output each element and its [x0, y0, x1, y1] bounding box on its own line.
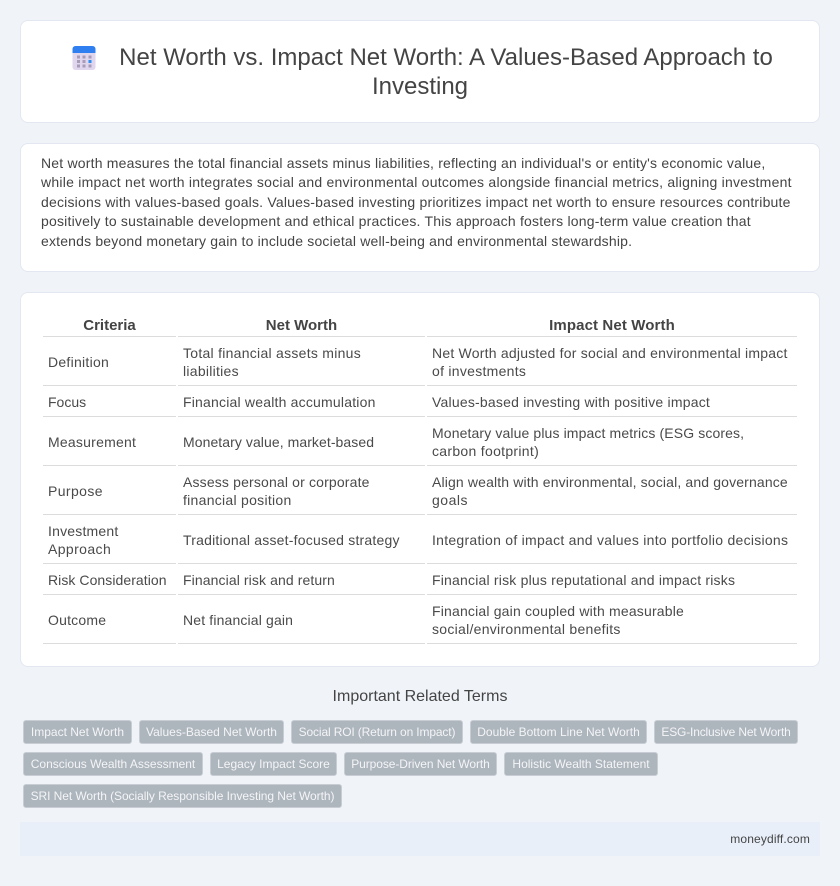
tag: Legacy Impact Score — [217, 757, 330, 771]
title: Net Worth vs. Impact Net Worth: A Values-Based Approach to — [119, 44, 773, 71]
header panel — [20, 20, 820, 123]
tag — [291, 720, 463, 744]
row: risk consideration: Financial risk and return — [183, 572, 335, 588]
row: definition: Net Worth adjusted for social and environmental impact — [432, 345, 788, 361]
row: investment approach — [48, 523, 788, 557]
panel: comparison table — [20, 292, 820, 667]
row: risk consideration: Risk Consideration — [48, 572, 167, 588]
row: risk consideration — [48, 572, 735, 588]
tag — [23, 720, 132, 744]
row: focus — [48, 394, 710, 410]
title: Investing — [372, 73, 468, 100]
tag — [344, 752, 497, 776]
row: measurement: Measurement — [48, 434, 136, 450]
row: outcome: Net financial gain — [183, 612, 293, 628]
icon: calendar — [72, 46, 96, 70]
row: purpose — [48, 474, 788, 508]
row: measurement — [48, 425, 744, 459]
row: purpose: Purpose — [48, 483, 103, 499]
row: investment approach: Traditional asset-focused strategy — [183, 532, 400, 548]
tag: Values-Based Net Worth — [146, 725, 277, 739]
row: purpose: financial position — [183, 492, 292, 508]
tag: SRI Net Worth (Socially Responsible Investing Net Worth) — [31, 789, 334, 803]
comparison table — [43, 316, 797, 644]
row: risk consideration: Financial risk plus reputational and impact risks — [432, 572, 735, 588]
row: measurement: carbon footprint) — [432, 443, 539, 459]
row: purpose: goals — [432, 492, 468, 508]
title — [119, 44, 773, 100]
related term tags — [23, 720, 798, 808]
row: purpose: Assess personal or corporate — [183, 474, 370, 490]
row: outcome: Outcome — [48, 612, 106, 628]
row: definition: Total financial assets minus — [183, 345, 361, 361]
row: outcome: Financial gain coupled with measurable — [432, 603, 684, 619]
row: investment approach: Approach — [48, 541, 111, 557]
row: investment approach: Investment — [48, 523, 118, 539]
tag — [139, 720, 284, 744]
row: focus: Financial wealth accumulation — [183, 394, 376, 410]
panel: summary paragraph — [20, 143, 820, 272]
tag: Purpose-Driven Net Worth — [351, 757, 490, 771]
row: outcome: social/environmental benefits — [432, 621, 621, 637]
table header: Net Worth — [266, 316, 337, 334]
summary text: while impact net worth integrates social and environmental outcomes alongside financial metrics, aligning investment — [41, 174, 792, 190]
row: measurement: Monetary value plus impact metrics (ESG scores, — [432, 425, 744, 441]
summary text — [41, 155, 792, 249]
row: definition: Definition — [48, 354, 109, 370]
table header: Criteria — [83, 316, 136, 334]
summary text: Net worth measures the total financial assets minus liabilities, reflecting an individual's or entity's economic value, — [41, 155, 765, 171]
tag: Social ROI (Return on Impact) — [299, 725, 455, 739]
summary text: decisions with values-based goals. Values-based investing prioritizes impact net worth to ensure resources contribute — [41, 194, 791, 210]
tag — [504, 752, 658, 776]
footer source text: moneydiff.com — [730, 832, 810, 846]
row: investment approach: Integration of impact and values into portfolio decisions — [432, 532, 788, 548]
row: definition — [48, 345, 788, 379]
row: definition: of investments — [432, 363, 526, 379]
row: definition: liabilities — [183, 363, 239, 379]
row: purpose: Align wealth with environmental, social, and governance — [432, 474, 788, 490]
tag: Double Bottom Line Net Worth — [477, 725, 640, 739]
table header: Impact Net Worth — [549, 316, 675, 334]
tag — [654, 720, 798, 744]
tag: Holistic Wealth Statement — [512, 757, 650, 771]
table header — [83, 316, 675, 334]
heading: important related terms: Important Related Terms — [333, 688, 507, 705]
tag — [23, 752, 203, 776]
row: focus: Focus — [48, 394, 86, 410]
tag — [210, 752, 337, 776]
summary text: positively to sustainable development and ethical practices. This approach fosters long-term value creation that — [41, 213, 751, 229]
row: outcome — [48, 603, 684, 637]
tag — [23, 784, 342, 808]
row: focus: Values-based investing with positive impact — [432, 394, 710, 410]
summary text: extends beyond monetary gain to include societal well-being and environmental stewardship. — [41, 233, 632, 249]
tag: ESG-Inclusive Net Worth — [661, 725, 791, 739]
footer bar — [20, 822, 820, 856]
tag — [470, 720, 647, 744]
tag: Conscious Wealth Assessment — [31, 757, 195, 771]
row: measurement: Monetary value, market-based — [183, 434, 374, 450]
tag: Impact Net Worth — [31, 725, 124, 739]
